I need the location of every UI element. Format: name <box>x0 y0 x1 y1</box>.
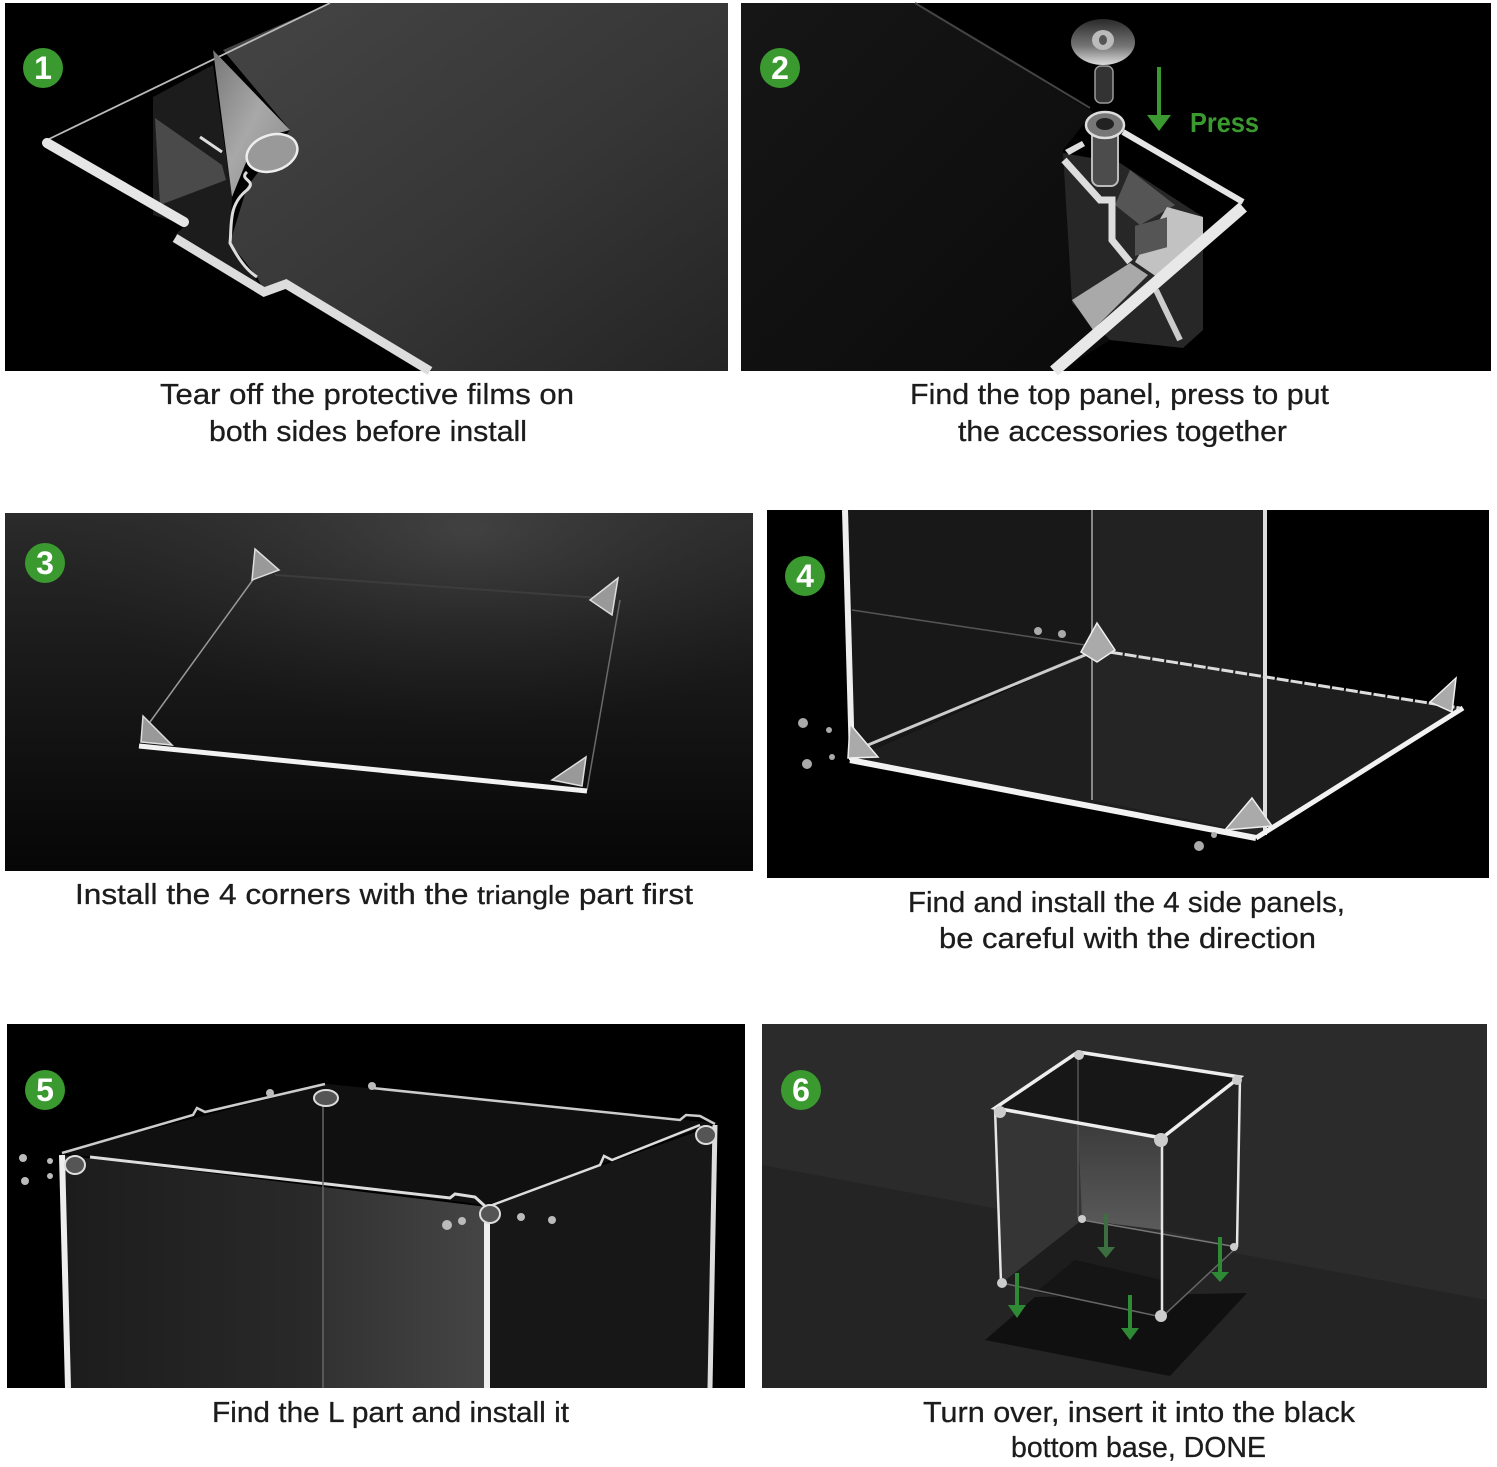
icon: green press arrow <box>1147 67 1171 131</box>
screws <box>798 627 1217 851</box>
corner brackets <box>994 1050 1242 1322</box>
caption: step 1: both sides before install <box>209 416 527 448</box>
badge: step 2: 2 <box>771 50 789 86</box>
acrylic front edge <box>1054 207 1243 371</box>
acrylic cube <box>995 1052 1240 1317</box>
acrylic edges <box>62 1084 715 1388</box>
badge: step 2 <box>760 48 800 88</box>
panel: step 1 tear off films <box>5 3 728 371</box>
tabletop <box>762 1165 1487 1388</box>
panel: step 3 install corners <box>5 513 753 871</box>
caption: step 6: Turn over, insert it into the black <box>923 1397 1356 1429</box>
panel: step 2 press accessories <box>741 3 1491 371</box>
acrylic white edges <box>47 143 184 222</box>
base plate <box>850 650 1462 838</box>
back panels <box>845 510 1265 760</box>
badge: step 4: 4 <box>796 558 814 594</box>
badge: step 4 <box>785 556 825 596</box>
badge: step 5: 5 <box>36 1072 54 1108</box>
caption: step 1 <box>160 379 574 448</box>
top opening <box>60 1084 715 1205</box>
panel: step 4 side panels <box>767 510 1489 878</box>
acrylic edges <box>845 510 1463 838</box>
L brackets and screws <box>65 1090 716 1223</box>
press-fit pin <box>1071 19 1135 186</box>
corner bracket <box>1063 141 1203 348</box>
badge: step 6 <box>781 1070 821 1110</box>
caption: step 2 <box>910 379 1329 448</box>
green arrows <box>1008 1214 1229 1340</box>
corner brackets <box>141 549 618 786</box>
peeled film cone <box>213 50 290 197</box>
caption: step 4: be careful with the direction <box>939 923 1316 955</box>
badge: step 6: 6 <box>792 1072 810 1108</box>
badge: step 3 <box>25 543 65 583</box>
box walls <box>62 1155 323 1388</box>
caption: step 3: Install the 4 corners with the triangle part first <box>75 879 693 911</box>
caption: step 1: Tear off the protective films on <box>160 379 574 411</box>
protective film sheet <box>223 3 728 371</box>
panel: step 6 black base <box>762 1024 1487 1388</box>
caption: step 5: Find the L part and install it <box>212 1397 569 1429</box>
badge: step 5 <box>25 1070 65 1110</box>
label: press: Press <box>1190 107 1259 138</box>
black base plate <box>985 1293 1247 1376</box>
top acrylic panel <box>741 3 1110 371</box>
badge: step 1: 1 <box>34 50 52 86</box>
caption: step 2: Find the top panel, press to put <box>910 379 1329 411</box>
badge: step 1 <box>23 48 63 88</box>
caption: step 4 <box>908 887 1345 955</box>
caption: step 4: Find and install the 4 side panels, <box>908 887 1345 919</box>
badge: step 3: 3 <box>36 545 54 581</box>
corner brackets <box>848 623 1456 830</box>
caption: step 2: the accessories together <box>958 416 1287 448</box>
caption: step 6 <box>923 1397 1356 1464</box>
dark reflected box <box>153 65 262 288</box>
panel: step 5 L part <box>7 1024 745 1388</box>
clear acrylic top edge <box>47 3 330 140</box>
caption: step 6: bottom base, DONE <box>1011 1432 1266 1464</box>
